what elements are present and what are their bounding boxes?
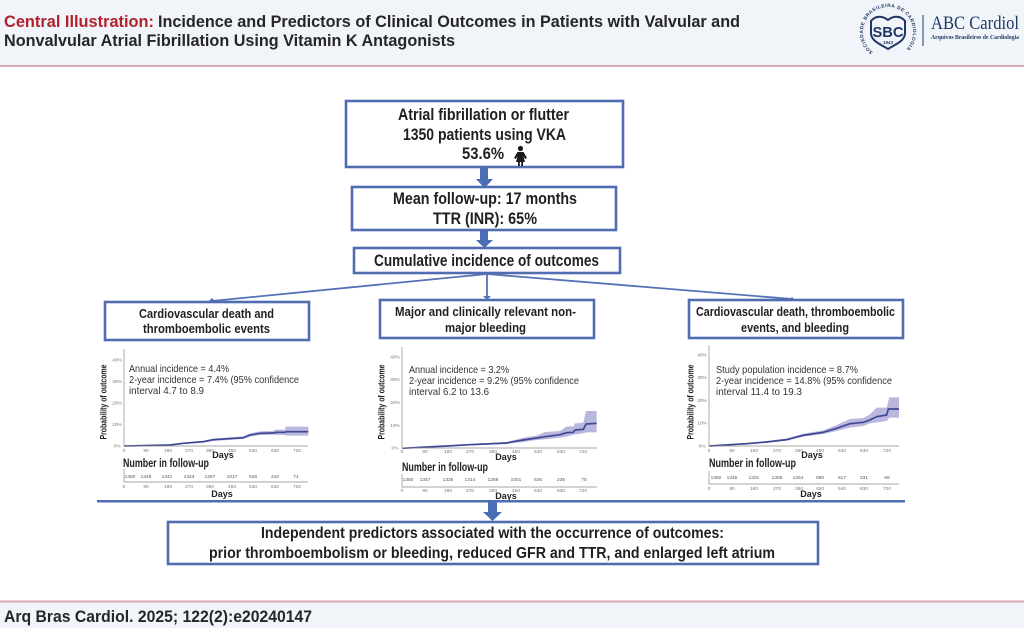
box: composite outcome: Cardiovascular death, thromboembolic (696, 305, 895, 319)
chart: cardiovascular death, thromboembolic events, and bleeding (686, 345, 899, 499)
chart: cardiovascular death and thromboembolic events: 540 (249, 484, 257, 490)
chart: cardiovascular death and thromboembolic events: 0% (114, 444, 121, 450)
chart: cardiovascular death and thromboembolic events: 540 (249, 448, 257, 454)
box: cardiovascular death and thromboembolic events: Cardiovascular death and (139, 307, 274, 321)
chart: cardiovascular death and thromboembolic events: Number in follow-up (123, 456, 209, 470)
box: cardiovascular death and thromboembolic events (105, 302, 309, 340)
chart: major and clinically relevant non-major bleeding: 540 (534, 488, 542, 494)
chart: major and clinically relevant non-major bleeding: 90 (422, 449, 428, 455)
chart: cardiovascular death and thromboembolic events: 360 (206, 448, 214, 454)
chart: major and clinically relevant non-major bleeding: 40% (390, 354, 401, 360)
chart: major and clinically relevant non-major bleeding: 360 (489, 449, 497, 455)
chart: cardiovascular death, thromboembolic events, and bleeding: 1264 (793, 475, 804, 481)
arrow: population to follow-up (476, 167, 493, 188)
chart: cardiovascular death and thromboembolic events: Days (211, 489, 233, 499)
chart: cardiovascular death, thromboembolic events, and bleeding: 69 (884, 475, 890, 481)
logo: SBC seal: SOCIEDADE BRASILEIRA DE CARDIOLOGIA (860, 4, 916, 54)
chart: major and clinically relevant non-major bleeding: 1347 (420, 477, 431, 483)
box: cardiovascular death and thromboembolic events: thromboembolic events (143, 322, 270, 336)
box: cumulative incidence: Cumulative incidence of outcomes (374, 252, 599, 270)
chart: cardiovascular death and thromboembolic events: 180 (164, 448, 172, 454)
chart: cardiovascular death, thromboembolic events, and bleeding: 270 (773, 448, 781, 454)
chart: major and clinically relevant non-major bleeding: 1269 (488, 477, 499, 483)
chart: cardiovascular death, thromboembolic events, and bleeding: Days (801, 450, 823, 460)
chart: major and clinically relevant non-major bleeding: 70 (581, 477, 587, 483)
chart: cardiovascular death and thromboembolic events: 538 (249, 474, 257, 480)
chart: major and clinically relevant non-major bleeding: 1350 (403, 477, 414, 483)
chart: cardiovascular death, thromboembolic events, and bleeding: 1306 (772, 475, 783, 481)
chart: major and clinically relevant non-major bleeding: 720 (579, 449, 587, 455)
title (4, 12, 740, 50)
chart: cardiovascular death and thromboembolic events: 1017 (227, 474, 238, 480)
chart: major and clinically relevant non-major bleeding: 0 (401, 449, 404, 455)
chart: cardiovascular death and thromboembolic events: 0 (123, 484, 126, 490)
chart: major and clinically relevant non-major bleeding: 720 (579, 488, 587, 494)
chart: cardiovascular death, thromboembolic events, and bleeding: 450 (816, 486, 824, 492)
box: population: Atrial fibrillation or flutter (398, 106, 569, 124)
chart: major and clinically relevant non-major bleeding: 236 (557, 477, 565, 483)
box: follow-up: TTR (INR): 65% (433, 210, 537, 228)
chart: cardiovascular death and thromboembolic events: 450 (228, 484, 236, 490)
chart: cardiovascular death, thromboembolic events, and bleeding: 1350 (711, 475, 722, 481)
chart: cardiovascular death, thromboembolic events, and bleeding: 0% (699, 444, 706, 450)
box: bleeding: Major and clinically relevant non- (395, 305, 576, 319)
chart: cardiovascular death and thromboembolic events: 90 (143, 484, 149, 490)
logo: ABC Cardiol wordmark: Arquivos Brasileiros de Cardiologia (931, 35, 1019, 41)
chart: major and clinically relevant non-major bleeding: 1335 (443, 477, 454, 483)
chart: cardiovascular death, thromboembolic events, and bleeding: 720 (883, 448, 891, 454)
chart: cardiovascular death and thromboembolic events: 720 (293, 484, 301, 490)
chart: cardiovascular death and thromboembolic events: 2-year incidence = 7.4% (95% confidence (129, 374, 299, 386)
chart: cardiovascular death and thromboembolic events: 450 (228, 448, 236, 454)
chart: major and clinically relevant non-major bleeding: 180 (444, 488, 452, 494)
chart: cardiovascular death and thromboembolic events: 180 (164, 484, 172, 490)
chart: cardiovascular death, thromboembolic events, and bleeding: 450 (816, 448, 824, 454)
chart: cardiovascular death and thromboembolic events: 270 (185, 484, 193, 490)
chart: major and clinically relevant non-major bleeding (376, 347, 597, 501)
title: Incidence and Predictors of Clinical Outcomes in Patients with Valvular and (158, 12, 740, 31)
chart: major and clinically relevant non-major bleeding: 450 (512, 449, 520, 455)
chart: cardiovascular death, thromboembolic events, and bleeding: 90 (729, 448, 735, 454)
chart: cardiovascular death and thromboembolic events: 40% (112, 358, 123, 364)
chart: cardiovascular death and thromboembolic events: 20% (112, 400, 123, 406)
chart: major and clinically relevant non-major bleeding: interval 6.2 to 13.6 (409, 386, 489, 398)
chart: cardiovascular death, thromboembolic events, and bleeding: 990 (816, 475, 824, 481)
box: bleeding (380, 300, 594, 338)
chart: major and clinically relevant non-major bleeding: 270 (466, 488, 474, 494)
chart: cardiovascular death and thromboembolic events: 71 (293, 474, 299, 480)
box: independent predictors: Independent predictors associated with the occurrence of outcomes: (261, 525, 724, 542)
chart: major and clinically relevant non-major bleeding: 20% (390, 400, 401, 406)
chart: cardiovascular death and thromboembolic events: 90 (143, 448, 149, 454)
chart: cardiovascular death, thromboembolic events, and bleeding: 10% (697, 420, 708, 426)
chart: cardiovascular death and thromboembolic events: 270 (185, 448, 193, 454)
chart: cardiovascular death and thromboembolic events: 360 (206, 484, 214, 490)
chart: cardiovascular death and thromboembolic events: 1341 (162, 474, 173, 480)
header band (0, 0, 1024, 67)
chart: major and clinically relevant non-major bleeding: 1314 (465, 477, 476, 483)
citation: Arq Bras Cardiol. 2025; 122(2):e20240147 (4, 608, 312, 626)
chart: cardiovascular death, thromboembolic events, and bleeding: 360 (795, 486, 803, 492)
chart: cardiovascular death and thromboembolic events: 1323 (184, 474, 195, 480)
chart: cardiovascular death, thromboembolic events, and bleeding: 1331 (749, 475, 760, 481)
chart: cardiovascular death, thromboembolic events, and bleeding: Days (800, 489, 822, 499)
chart: cardiovascular death, thromboembolic events, and bleeding: 630 (860, 486, 868, 492)
chart: major and clinically relevant non-major bleeding: Annual incidence = 3.2% (409, 364, 509, 376)
chart: major and clinically relevant non-major bleeding: Number in follow-up (402, 460, 488, 474)
chart: cardiovascular death, thromboembolic events, and bleeding: 517 (838, 475, 846, 481)
icon: woman (514, 146, 527, 166)
chart: cardiovascular death, thromboembolic events, and bleeding: 20% (697, 398, 708, 404)
footer band (0, 600, 1024, 628)
chart: cardiovascular death, thromboembolic events, and bleeding: interval 11.4 to 19.3 (716, 386, 802, 398)
chart: cardiovascular death, thromboembolic events, and bleeding: 40% (697, 352, 708, 358)
chart: cardiovascular death, thromboembolic events, and bleeding: 231 (860, 475, 868, 481)
chart: cardiovascular death, thromboembolic events, and bleeding: 90 (729, 486, 735, 492)
chart: cardiovascular death and thromboembolic events: 630 (271, 484, 279, 490)
box: bleeding: major bleeding (445, 321, 526, 335)
chart: cardiovascular death and thromboembolic events: 1350 (125, 474, 136, 480)
chart: cardiovascular death, thromboembolic events, and bleeding: 0 (708, 448, 711, 454)
arrows: branches to outcomes (208, 274, 796, 302)
arrow: to predictors (483, 501, 502, 521)
chart: major and clinically relevant non-major bleeding: 540 (534, 449, 542, 455)
chart: cardiovascular death, thromboembolic events, and bleeding: 30% (697, 375, 708, 381)
chart: major and clinically relevant non-major bleeding: 630 (557, 488, 565, 494)
chart: cardiovascular death, thromboembolic events, and bleeding: 720 (883, 486, 891, 492)
chart: cardiovascular death, thromboembolic events, and bleeding: 2-year incidence = 14.8% (95% confidence (716, 375, 892, 387)
chart: cardiovascular death and thromboembolic events: 1287 (205, 474, 216, 480)
box: population: 53.6% (462, 145, 504, 163)
box: composite outcome (689, 300, 903, 338)
chart: major and clinically relevant non-major bleeding: 0% (392, 446, 399, 452)
chart: major and clinically relevant non-major bleeding: 30% (390, 377, 401, 383)
title: Nonvalvular Atrial Fibrillation Using Vitamin K Antagonists (4, 31, 455, 50)
chart: cardiovascular death, thromboembolic events, and bleeding: Probability of outcome (686, 364, 696, 440)
box: cumulative incidence (354, 248, 620, 273)
chart: cardiovascular death, thromboembolic events, and bleeding: 0 (708, 486, 711, 492)
chart: cardiovascular death and thromboembolic events: 630 (271, 448, 279, 454)
chart: cardiovascular death, thromboembolic events, and bleeding: 180 (750, 486, 758, 492)
chart: major and clinically relevant non-major bleeding: 10% (390, 423, 401, 429)
chart: cardiovascular death and thromboembolic events: Days (212, 450, 234, 460)
box: independent predictors (168, 522, 818, 564)
chart: cardiovascular death and thromboembolic events: 0 (123, 448, 126, 454)
chart: major and clinically relevant non-major bleeding: 630 (557, 449, 565, 455)
chart: cardiovascular death, thromboembolic events, and bleeding: 540 (838, 448, 846, 454)
chart: cardiovascular death and thromboembolic events (98, 349, 308, 499)
chart: cardiovascular death, thromboembolic events, and bleeding: Number in follow-up (709, 456, 796, 470)
logo divider (922, 15, 924, 46)
chart: cardiovascular death, thromboembolic events, and bleeding: 1345 (727, 475, 738, 481)
box: follow-up (352, 187, 616, 230)
box: population: 1350 patients using VKA (403, 126, 566, 144)
chart: cardiovascular death and thromboembolic events: Probability of outcome (98, 364, 110, 440)
chart: cardiovascular death and thromboembolic events: 242 (271, 474, 279, 480)
chart: major and clinically relevant non-major bleeding: 360 (489, 488, 497, 494)
chart: cardiovascular death and thromboembolic events: interval 4.7 to 8.9 (129, 385, 204, 397)
box: composite outcome: events, and bleeding (741, 321, 849, 335)
logo: SBC seal: 1943 (883, 40, 894, 45)
chart: major and clinically relevant non-major bleeding: 0 (401, 488, 404, 494)
chart: major and clinically relevant non-major bleeding: 180 (444, 449, 452, 455)
chart: cardiovascular death and thromboembolic events: Annual incidence = 4.4% (129, 363, 229, 375)
chart: major and clinically relevant non-major bleeding: Days (495, 491, 517, 501)
title: Central Illustration: (4, 12, 154, 31)
chart: major and clinically relevant non-major bleeding: 2-year incidence = 9.2% (95% confidence (409, 375, 579, 387)
chart: cardiovascular death and thromboembolic events: 10% (112, 422, 123, 428)
chart: cardiovascular death and thromboembolic events: 30% (112, 379, 123, 385)
chart: major and clinically relevant non-major bleeding: 450 (512, 488, 520, 494)
chart: cardiovascular death and thromboembolic events: 1348 (141, 474, 152, 480)
box: independent predictors: prior thromboembolism or bleeding, reduced GFR and TTR, and enlarged left atrium (209, 545, 775, 562)
chart: cardiovascular death, thromboembolic events, and bleeding: 630 (860, 448, 868, 454)
divider line above predictors (97, 500, 905, 502)
chart: cardiovascular death, thromboembolic events, and bleeding: 270 (773, 486, 781, 492)
chart: major and clinically relevant non-major bleeding: 90 (422, 488, 428, 494)
chart: major and clinically relevant non-major bleeding: 1001 (511, 477, 522, 483)
chart: cardiovascular death, thromboembolic events, and bleeding: Study population incidence = 8.7% (716, 364, 858, 376)
arrow: follow-up to cumulative incidence (476, 230, 493, 248)
chart: major and clinically relevant non-major bleeding: Days (495, 452, 517, 462)
chart: major and clinically relevant non-major bleeding: Probability of outcome (376, 364, 388, 440)
chart: cardiovascular death, thromboembolic events, and bleeding: 180 (750, 448, 758, 454)
chart: cardiovascular death and thromboembolic events: 720 (293, 448, 301, 454)
chart: major and clinically relevant non-major bleeding: 270 (466, 449, 474, 455)
box: population (346, 101, 623, 167)
logo: SBC seal: SBC (872, 24, 904, 41)
chart: major and clinically relevant non-major bleeding: 525 (534, 477, 542, 483)
box: follow-up: Mean follow-up: 17 months (393, 190, 577, 208)
chart: cardiovascular death, thromboembolic events, and bleeding: 360 (795, 448, 803, 454)
chart: cardiovascular death, thromboembolic events, and bleeding: 540 (838, 486, 846, 492)
